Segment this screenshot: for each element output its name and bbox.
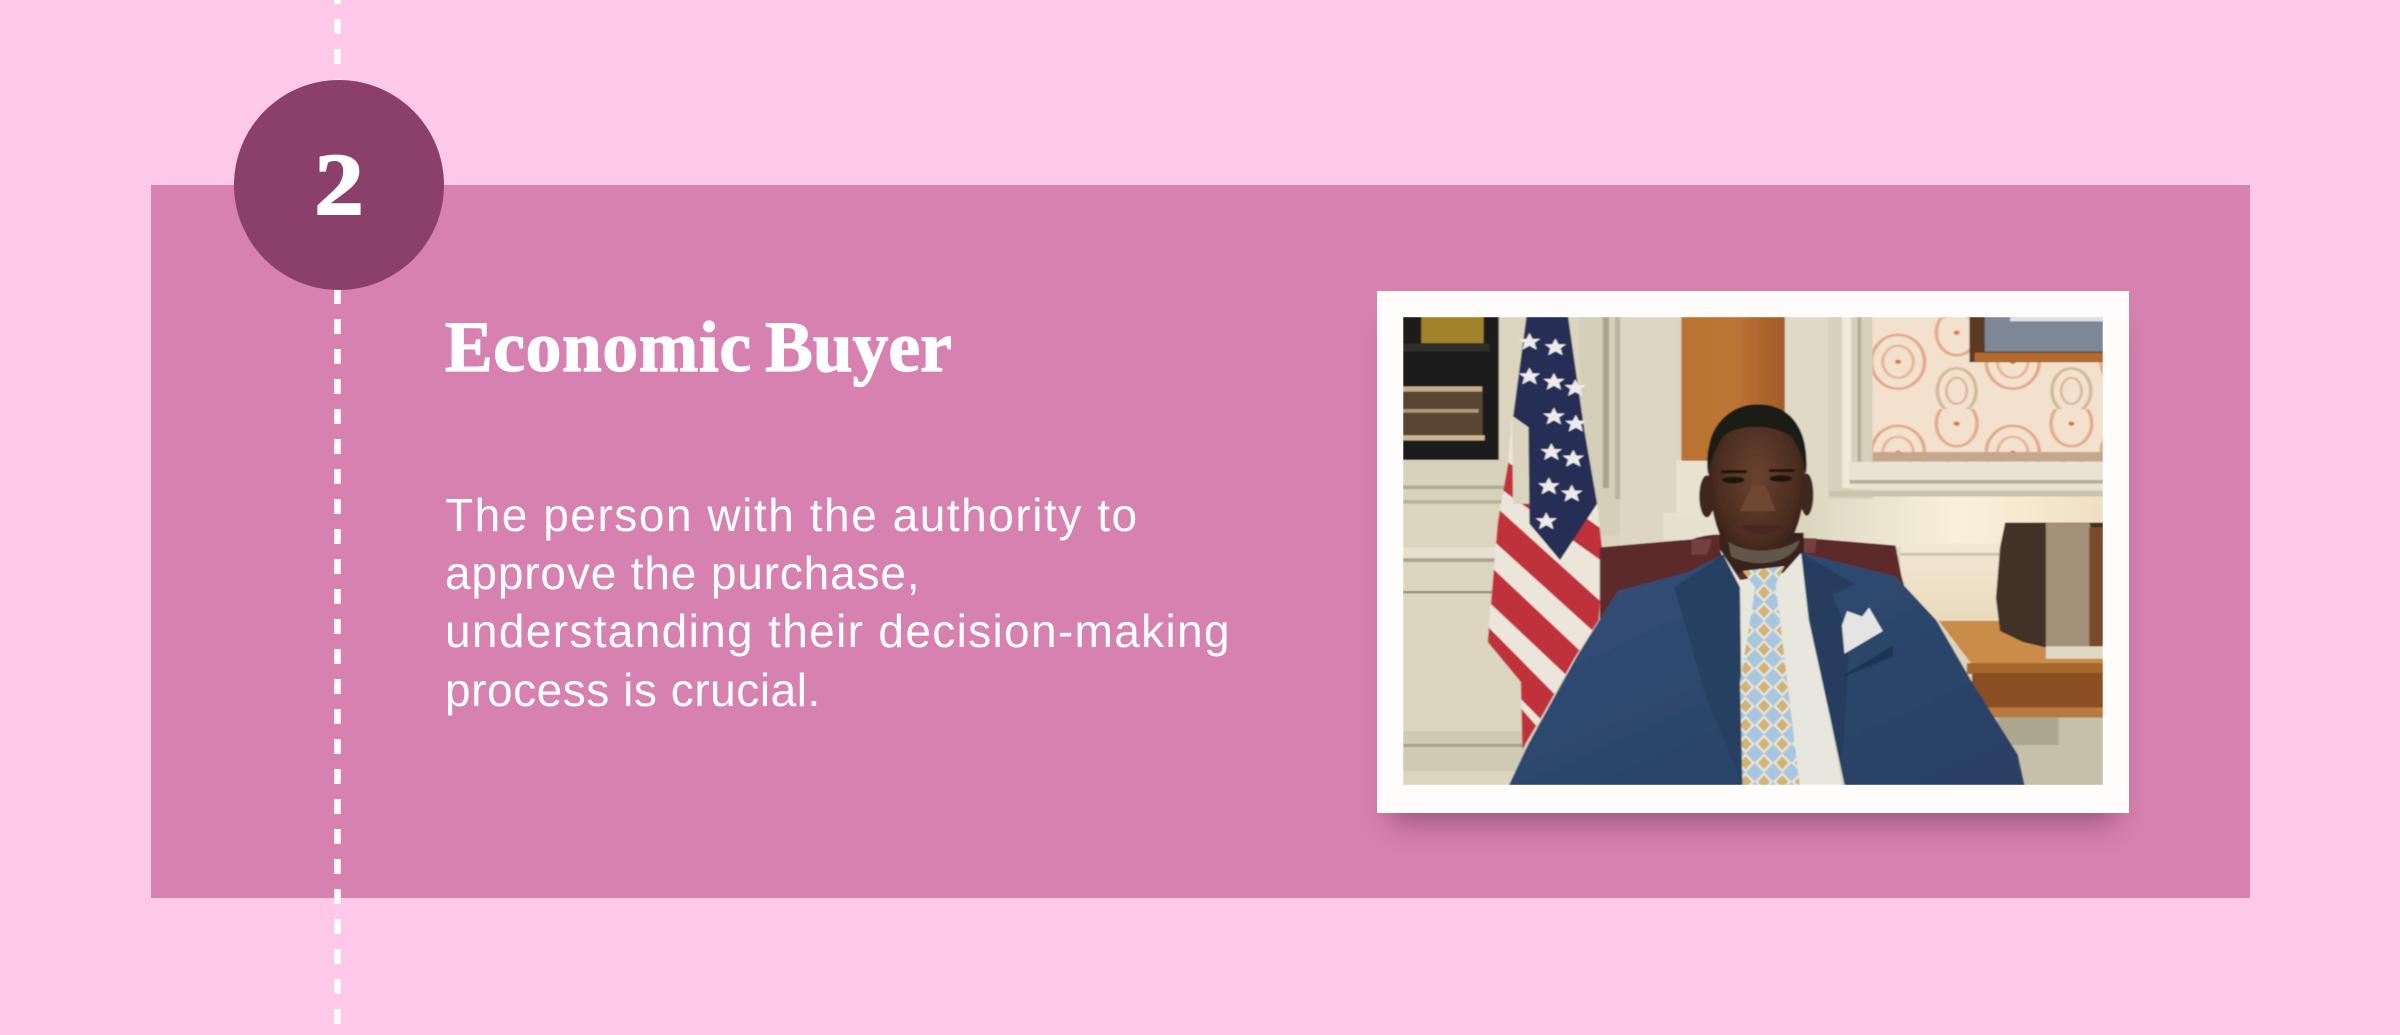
head	[1708, 405, 1805, 563]
description text: process is crucial.	[445, 664, 821, 716]
suit	[1509, 553, 2024, 785]
wallpaper	[1873, 317, 2103, 462]
neck	[1720, 533, 1804, 573]
photo frame	[1377, 291, 2129, 813]
wooden chest	[1996, 523, 2103, 647]
wood panel	[1681, 317, 1785, 461]
dashed timeline	[334, 0, 341, 1024]
description text: approve the purchase,	[445, 547, 920, 599]
step number badge	[234, 80, 444, 290]
face details	[1721, 470, 1747, 473]
step number badge: 2	[314, 137, 364, 234]
left shelf	[1403, 317, 1499, 460]
description text	[445, 489, 1231, 716]
leather chair	[1600, 534, 1921, 642]
description text: The person with the authority to	[445, 489, 1139, 541]
flag	[1486, 317, 1603, 749]
table	[1939, 621, 2103, 665]
panel: main band	[151, 185, 2250, 898]
description text: understanding their decision-making	[445, 605, 1231, 657]
room background	[1403, 317, 2103, 785]
heading: Economic Buyer	[445, 308, 952, 387]
shirt	[1720, 549, 1842, 785]
wall mouldings left	[1403, 460, 1505, 504]
tie	[1740, 566, 1800, 785]
photo: man in suit with flag	[1403, 317, 2103, 785]
pocket square	[1842, 607, 1883, 654]
hair	[1707, 404, 1807, 475]
picture frame	[1969, 317, 2103, 362]
column mouldings	[1579, 317, 1676, 535]
right wall	[1785, 317, 2103, 499]
